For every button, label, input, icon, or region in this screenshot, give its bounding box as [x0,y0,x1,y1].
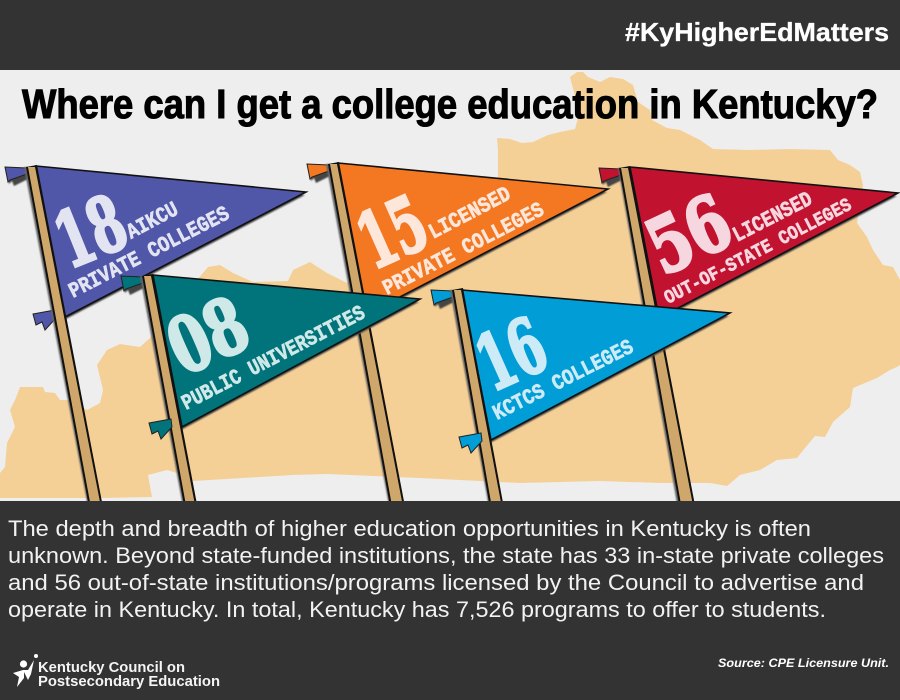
description text: unknown. Beyond state-funded institutions, the state has 33 in-state private colleges [8,543,884,568]
label: AIKCU: AIKCU [123,198,183,245]
number 16: 16 [463,300,560,408]
label: out-of-state colleges: OUT-OF-STATE COLLEGES [661,194,855,309]
logo wordmark [38,660,220,690]
label: licensed: LICENSED [425,183,515,245]
source note: Source: CPE Licensure Unit. [718,656,889,670]
pennant: 15 licensed private colleges [307,162,608,517]
label: private colleges: PRIVATE COLLEGES [379,198,549,301]
description text: The depth and breadth of higher education opportunities in Kentucky is often [8,516,811,541]
hashtag: #KyHigherEdMatters [625,17,889,47]
logo: Kentucky Council on Postsecondary Education [13,654,220,690]
label: licensed: LICENSED [729,188,817,248]
description text: operate in Kentucky. In total, Kentucky has 7,526 programs to offer to students. [8,597,826,622]
label: public universities: PUBLIC UNIVERSITIES [178,302,370,416]
label: private colleges: PRIVATE COLLEGES [65,202,234,304]
pennant: 18 AIKCU private colleges [5,165,306,502]
logo wordmark: Kentucky Council on [38,660,185,676]
number 56: 56 [633,177,745,292]
pennant: 56 licensed out-of-state colleges [599,166,898,521]
number 15: 15 [344,178,441,286]
label: KCTCS colleges: KCTCS COLLEGES [489,336,638,426]
logo wordmark: Postsecondary Education [38,674,220,690]
number 18: 18 [42,178,139,286]
bottom panel [0,501,900,700]
description text [8,516,884,622]
Kentucky map background [0,72,900,498]
top header bar [0,0,900,70]
pennant: 08 public universities [121,274,420,609]
pennant: 16 KCTCS colleges [431,288,730,508]
number 08: 08 [154,279,262,392]
icon: leaping figure [13,654,38,687]
description text: and 56 out-of-state institutions/programs licensed by the Council to advertise and [8,570,864,595]
